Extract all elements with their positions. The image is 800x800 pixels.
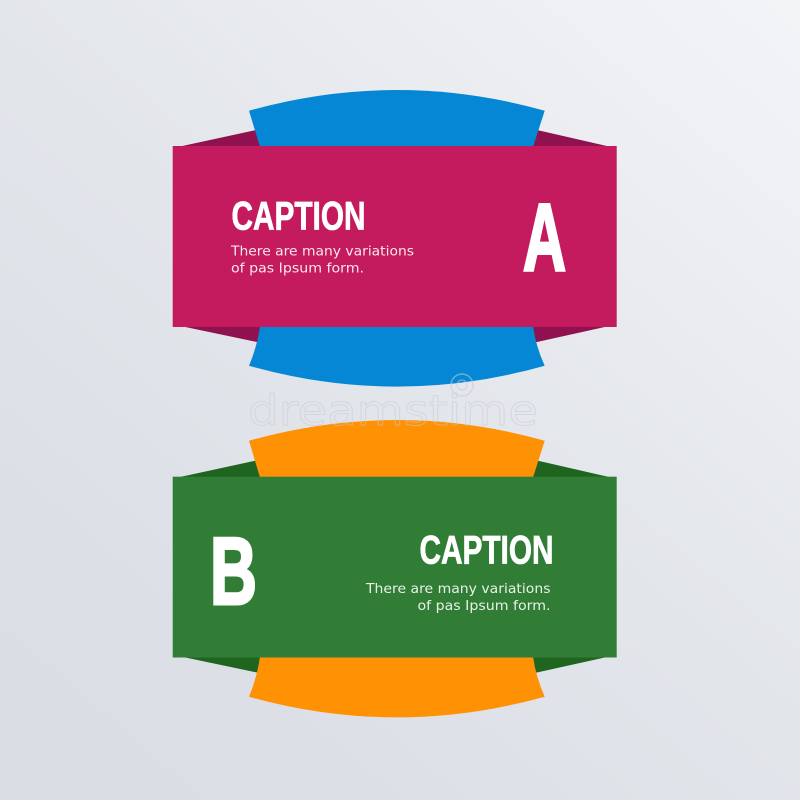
blue ribbon bottom A <box>249 326 545 387</box>
fold flaps B <box>180 460 609 672</box>
watermark <box>248 374 538 435</box>
letter B: B <box>210 518 257 625</box>
green panel B <box>173 477 617 658</box>
letter A: A <box>523 184 566 292</box>
red panel A <box>173 146 617 327</box>
description B: There are many variations <box>365 582 551 597</box>
banner B <box>173 420 617 717</box>
fold flaps A <box>180 130 609 342</box>
banner A <box>173 90 617 387</box>
watermark: dreamstime <box>248 386 538 435</box>
caption A: CAPTION <box>232 194 366 238</box>
description A: There are many variations <box>230 245 414 260</box>
orange ribbon top B <box>249 420 545 478</box>
description B: of pas Ipsum form. <box>418 599 550 614</box>
description A: of pas Ipsum form. <box>231 262 364 277</box>
caption B: CAPTION <box>420 528 554 572</box>
blue ribbon top A <box>249 90 545 147</box>
orange ribbon bottom B <box>249 656 545 717</box>
